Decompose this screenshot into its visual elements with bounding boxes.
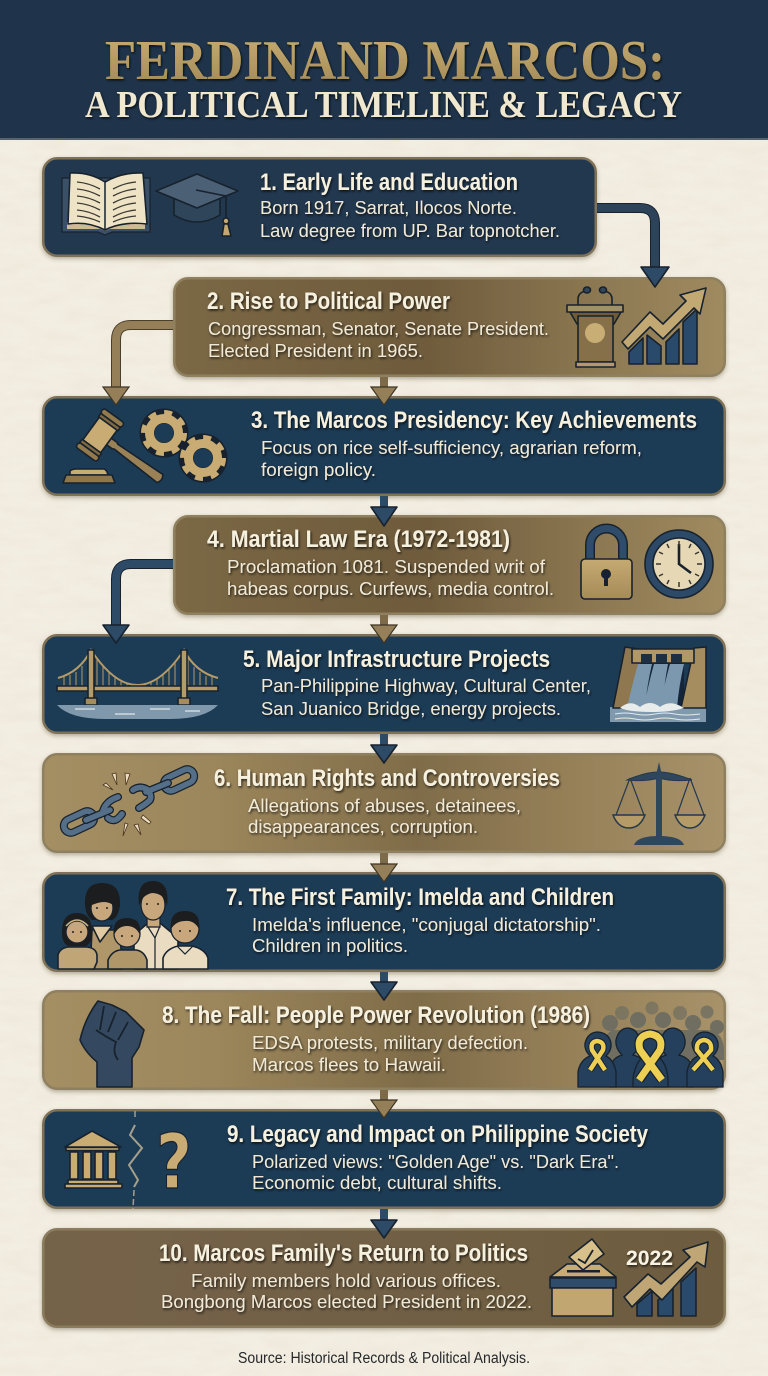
icon: broken chain bbox=[62, 767, 196, 835]
body 5: Pan-Philippine Highway, Cultural Center, bbox=[261, 675, 591, 696]
body 1 bbox=[260, 197, 560, 241]
panel 1 background bbox=[43, 158, 596, 256]
icon: 2022 rising chart bbox=[624, 1242, 708, 1316]
body 6: disappearances, corruption. bbox=[248, 816, 478, 837]
body 3 bbox=[261, 437, 642, 480]
icon: gears bbox=[144, 412, 224, 478]
header band bbox=[0, 0, 768, 140]
icon: government temple bbox=[65, 1131, 122, 1188]
arrow: step 8 to 9 bbox=[371, 1090, 397, 1118]
icon: family portrait bbox=[58, 881, 208, 969]
girl bbox=[58, 913, 97, 969]
arrow: step 5 to 6 bbox=[371, 734, 397, 763]
icon: clock bbox=[645, 530, 713, 598]
heading 5: 5. Major Infrastructure Projects bbox=[243, 646, 550, 673]
body 7 bbox=[252, 914, 601, 956]
arrow: step 2 to 3 left bbox=[103, 325, 173, 405]
panel 6 background bbox=[43, 754, 725, 852]
heading 7: 7. The First Family: Imelda and Children bbox=[226, 884, 614, 911]
panel 2: rise to power bbox=[174, 278, 725, 376]
panel 3 background bbox=[43, 397, 725, 495]
icon: scales of justice bbox=[613, 762, 705, 845]
icon: podium bbox=[567, 287, 623, 367]
body 9: Polarized views: "Golden Age" vs. "Dark Era". bbox=[252, 1151, 619, 1172]
body 2 bbox=[208, 318, 549, 361]
body 6: Allegations of abuses, detainees, bbox=[248, 795, 521, 816]
panel 5 background bbox=[43, 635, 725, 733]
panel 9 background bbox=[43, 1110, 725, 1208]
arrow: step 3 to 4 bbox=[371, 496, 397, 526]
body 10 bbox=[161, 1270, 532, 1312]
arrow: step 7 to 8 bbox=[371, 972, 397, 1000]
arrow: step 2 to 3 center bbox=[371, 377, 397, 405]
body 9 bbox=[252, 1151, 619, 1193]
panel 6: human rights bbox=[43, 754, 725, 852]
body 7: Children in politics. bbox=[252, 935, 408, 956]
crack divider bbox=[129, 1111, 142, 1209]
arrow: step 1 to 2 bbox=[597, 208, 669, 287]
body 5 bbox=[261, 675, 591, 719]
arrow: step 9 to 10 bbox=[371, 1209, 397, 1238]
younger son bbox=[163, 911, 208, 969]
arrow: step 4 to 5 left bbox=[103, 564, 173, 643]
body 2: Elected President in 1965. bbox=[208, 340, 423, 361]
back row of crowd bbox=[602, 1002, 724, 1060]
body 8: Marcos flees to Hawaii. bbox=[252, 1054, 446, 1075]
panel 7: first family bbox=[43, 873, 725, 971]
panel 9: legacy bbox=[43, 1110, 725, 1209]
body 5: San Juanico Bridge, energy projects. bbox=[261, 698, 561, 719]
heading 1: 1. Early Life and Education bbox=[260, 169, 518, 196]
heading 8: 8. The Fall: People Power Revolution (1986) bbox=[162, 1002, 590, 1029]
source note: Source: Historical Records & Political Analysis. bbox=[238, 1350, 530, 1367]
panel 10: return to politics bbox=[43, 1229, 725, 1327]
icon: gavel bbox=[63, 408, 176, 499]
icon: open book bbox=[62, 173, 150, 235]
title line 1: FERDINAND MARCOS: bbox=[105, 30, 665, 92]
icon: rising chart bbox=[622, 288, 706, 364]
icon: raised fist bbox=[80, 1001, 144, 1087]
heading 3: 3. The Marcos Presidency: Key Achievements bbox=[251, 407, 697, 434]
body 4 bbox=[227, 556, 554, 599]
body 3: Focus on rice self-sufficiency, agrarian reform, bbox=[261, 437, 642, 458]
body 1: Law degree from UP. Bar topnotcher. bbox=[260, 220, 560, 241]
body 3: foreign policy. bbox=[261, 459, 376, 480]
panel 1: early life bbox=[43, 158, 596, 256]
heading 6: 6. Human Rights and Controversies bbox=[214, 765, 560, 792]
body 2: Congressman, Senator, Senate President. bbox=[208, 318, 549, 339]
panel 10 background bbox=[43, 1229, 725, 1327]
icon: graduation cap bbox=[156, 174, 238, 236]
body 1: Born 1917, Sarrat, Ilocos Norte. bbox=[260, 197, 517, 218]
heading 2: 2. Rise to Political Power bbox=[207, 288, 450, 315]
body 9: Economic debt, cultural shifts. bbox=[252, 1172, 502, 1193]
body 10: Family members hold various offices. bbox=[191, 1270, 501, 1291]
panel 2 background bbox=[174, 278, 725, 376]
arrow: step 4 to 5 center bbox=[371, 615, 397, 643]
icon: question mark: ? bbox=[156, 1117, 192, 1206]
panel 7 background bbox=[43, 873, 725, 971]
body 6 bbox=[248, 795, 521, 837]
panel 3: presidency bbox=[43, 397, 725, 499]
heading 10: 10. Marcos Family's Return to Politics bbox=[159, 1240, 528, 1267]
body 10: Bongbong Marcos elected President in 2022. bbox=[161, 1291, 532, 1312]
icon: chain sparks bbox=[103, 773, 151, 836]
icon: hydro dam bbox=[610, 647, 706, 722]
icon: suspension bridge bbox=[57, 650, 218, 719]
icon: crowd with yellow ribbons bbox=[578, 1002, 724, 1087]
title line 2: A POLITICAL TIMELINE & LEGACY bbox=[85, 84, 682, 126]
body 8: EDSA protests, military defection. bbox=[252, 1032, 528, 1053]
mother bbox=[85, 883, 122, 969]
panel 4 background bbox=[174, 516, 725, 614]
father bbox=[134, 881, 178, 969]
panel 8: the fall bbox=[43, 991, 725, 1089]
label: 2022: 2022 bbox=[626, 1247, 673, 1270]
icon: padlock bbox=[581, 528, 632, 599]
front row of crowd bbox=[578, 1028, 723, 1087]
body 4: Proclamation 1081. Suspended writ of bbox=[227, 556, 546, 577]
heading 4: 4. Martial Law Era (1972-1981) bbox=[207, 526, 510, 553]
icon: ballot box bbox=[550, 1239, 616, 1316]
body 7: Imelda's influence, "conjugal dictatorship". bbox=[252, 914, 601, 935]
panel 8 background bbox=[43, 991, 725, 1089]
panel 4: martial law bbox=[174, 516, 725, 614]
body 8 bbox=[252, 1032, 528, 1075]
body 4: habeas corpus. Curfews, media control. bbox=[227, 578, 554, 599]
panel 5: infrastructure bbox=[43, 635, 725, 733]
arrow: step 6 to 7 bbox=[371, 853, 397, 882]
heading 9: 9. Legacy and Impact on Philippine Society bbox=[227, 1121, 649, 1148]
middle boy bbox=[108, 918, 147, 969]
